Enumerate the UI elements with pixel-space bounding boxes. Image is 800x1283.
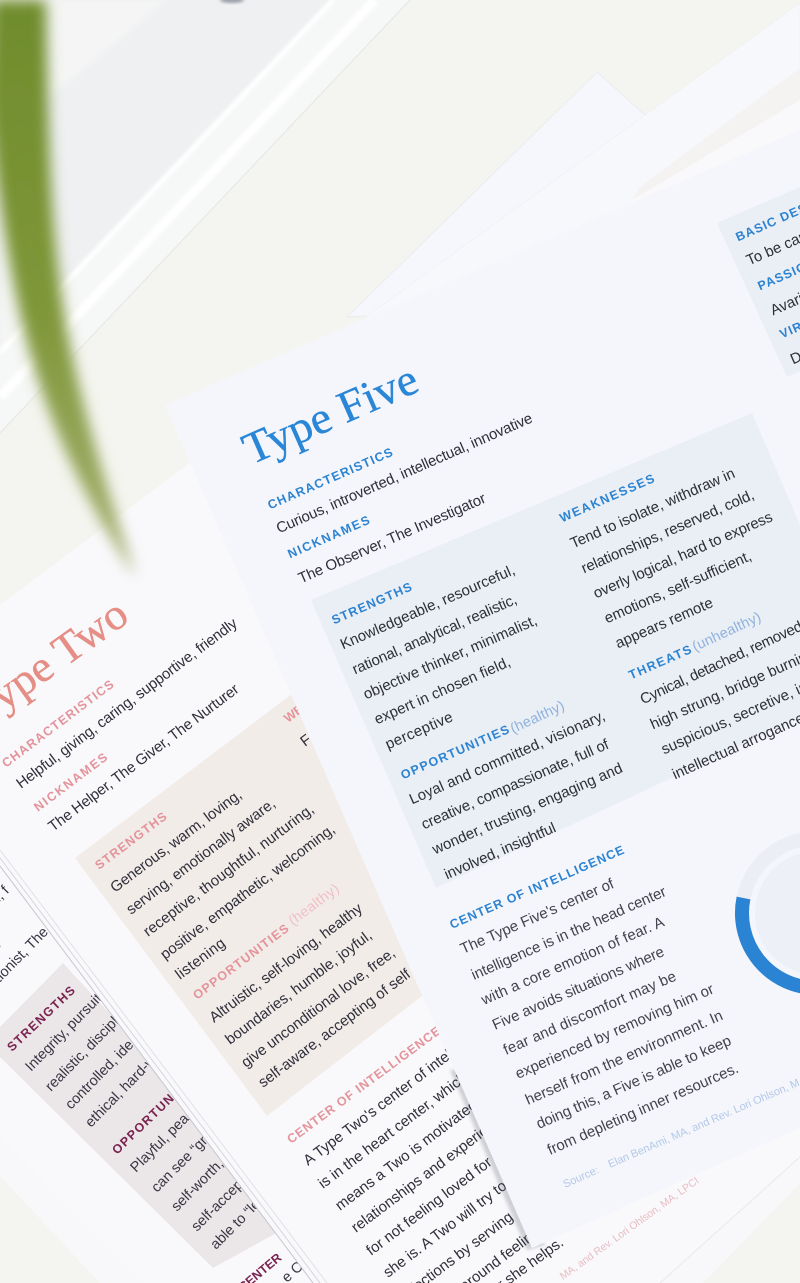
title: Type Five: Type Five — [235, 354, 425, 474]
text: Type Two center of intelligence: means a Two is motivated by — [332, 1084, 497, 1214]
text: Type Two strengths: positive, empathetic, welcoming, — [157, 821, 338, 963]
text: opportunities: involved, insightful — [442, 819, 558, 883]
text: Type One opportunities: able to “let go” — [208, 1176, 284, 1253]
text: Type Two characteristics and nicknames: CHARACTERISTICS — [0, 677, 116, 770]
text: opportunities: creative, compassionate, full of — [419, 736, 612, 833]
text: Type One strengths: STRENGTHS — [4, 983, 78, 1054]
text: Type Two center of intelligence — [284, 1018, 567, 1283]
text: Type One strengths: ethical, hard-working — [82, 1024, 188, 1131]
text: Type Two opportunities: give unconditional love, free, — [238, 944, 399, 1071]
text: Type Two characteristics and nicknames: Helpful, giving, caring, supportive, friendly — [13, 615, 241, 792]
text: Type One strengths — [4, 979, 188, 1131]
second back sheet — [345, 3, 800, 332]
text: strengths — [330, 562, 540, 753]
text: Type Two opportunities: OPPORTUNITIES — [190, 921, 291, 1002]
text: threats: THREATS — [627, 642, 694, 682]
text: Type One opportunities: self-worth, — [169, 1156, 227, 1215]
text: Type Two center of intelligence: she is. A Two will try to win — [380, 1161, 531, 1281]
text: Type Two strengths: STRENGTHS — [92, 809, 169, 872]
tinted panel: basic desire, passion, virtue — [717, 187, 800, 377]
text: Type Two strengths — [92, 786, 338, 983]
text: weaknesses: Tend to isolate, withdraw in — [568, 465, 738, 552]
text: weaknesses: appears remote — [613, 594, 716, 652]
sheet: Type Five — [165, 130, 800, 1248]
tinted panel: Type Two — [75, 665, 520, 1116]
text: strengths: rational, analytical, realistic, — [350, 591, 520, 678]
text: Type Two weaknesses fragment: Fear — [297, 718, 332, 750]
text: center of intelligence: CENTER OF INTELLIGENCE — [448, 843, 626, 932]
text: center of intelligence: The Type Five's center of — [458, 875, 617, 958]
text: opportunities — [399, 698, 625, 883]
text: Type Two weaknesses fragment: WEAKNESSES — [281, 661, 361, 725]
text: characteristics and nicknames: NICKNAMES — [286, 513, 372, 561]
sheet edge on stack — [660, 1157, 800, 1283]
text: weaknesses: relationships, reserved, cold, — [579, 486, 757, 577]
text: opportunities: OPPORTUNITIES — [399, 722, 511, 782]
text: center of intelligence: intelligence is in the head center — [469, 883, 669, 984]
shadow under lower left edge of Type Five sheet — [450, 1070, 545, 1250]
text: opportunities: wonder, trusting, engaging and — [429, 760, 625, 859]
text: Type Two opportunities: boundaries, humble, joyful, — [222, 927, 375, 1048]
text: Type One summary lines — [0, 882, 52, 1016]
source line: Type Two: MA, and Rev. Lori Ohlson, MA, LPCI — [558, 1175, 701, 1282]
text: Type Two opportunities: Altruistic, self-loving, healthy — [206, 900, 366, 1026]
text: strengths: objective thinker, minimalist, — [361, 612, 540, 703]
text: Type Two strengths: Generous, warm, loving, — [107, 786, 245, 896]
source line: Type Five — [561, 1062, 800, 1191]
text: characteristics and nicknames — [266, 410, 535, 587]
text: Type One strengths: realistic, disciplined, — [42, 992, 144, 1095]
text: opportunities: Loyal and committed, visionary, — [407, 707, 608, 808]
text: Type Two characteristics and nicknames: NICKNAMES — [31, 750, 110, 814]
text: Type One opportunities: OPPORTUNITIES — [109, 1065, 204, 1157]
text: Type Two strengths: serving, emotionally aware, — [123, 795, 279, 918]
text: characteristics and nicknames: Curious, introverted, intellectual, innovative — [274, 410, 535, 537]
donut chart: center of intelligence — [742, 838, 800, 988]
text: Type One opportunities: Playful, peaceful, — [128, 1086, 217, 1176]
text: weaknesses: overly logical, hard to express — [591, 509, 775, 602]
text: Type Two center of intelligence: is in the heart center, which — [315, 1069, 471, 1192]
tinted panel: strengths, weaknesses, opportunities, threats — [311, 413, 800, 888]
clear acrylic object in the top left corner — [0, 0, 410, 433]
text: Type Two characteristics and nicknames: The Helper, The Giver, The Nurturer — [45, 681, 242, 835]
text: basic desire, passion, virtue — [734, 191, 800, 368]
text: Type Two opportunities: self-aware, accepting of self — [255, 965, 415, 1091]
text: Type Two strengths: receptive, thoughtful, nurturing, — [140, 801, 317, 940]
text: center of intelligence: experienced by removing him or — [513, 981, 716, 1083]
text: Type Two center of intelligence: CENTER OF INTELLIGENCE — [284, 1024, 443, 1146]
back sheet with pointed corner — [347, 72, 660, 317]
text: Type One opportunities: self-accepting, — [189, 1157, 266, 1235]
tinted panel on second back sheet — [625, 68, 800, 210]
text: weaknesses: WEAKNESSES — [558, 471, 657, 525]
text: strengths: Knowledgeable, resourceful, — [338, 562, 518, 653]
text: center of intelligence: doing this, a Five is able to keep — [534, 1032, 734, 1133]
text: strengths: STRENGTHS — [330, 580, 414, 627]
text: center of intelligence — [448, 843, 741, 1159]
text: Type Two opportunities: (healthy) — [286, 881, 343, 929]
text: opportunities: (healthy) — [508, 698, 567, 737]
text: Type One strengths: controlled, idealistic, — [62, 1008, 165, 1113]
text: Type Two center of intelligence: relationships and experiences — [348, 1103, 517, 1236]
source line: Type Five: Source: — [561, 1164, 601, 1191]
text: Type Two center of intelligence: for not feeling loved for who — [363, 1135, 521, 1259]
text: center of intelligence: from depleting inner resources. — [545, 1060, 741, 1159]
text: Type Two strengths: listening — [172, 935, 229, 983]
text: Type Two center of intelligence: A Type Two's center of intelligence — [300, 1018, 493, 1169]
text: center of intelligence: Five avoids situations where — [490, 943, 667, 1034]
text: strengths: expert in chosen field, — [372, 654, 513, 728]
text: strengths: perceptive — [383, 709, 456, 753]
text: Type Two opportunities — [190, 881, 415, 1091]
text: characteristics and nicknames: The Observer, The Investigator — [296, 490, 488, 587]
text: Type One opportunities — [109, 1065, 307, 1283]
tinted panel: Type One — [0, 963, 300, 1268]
text: center of intelligence: fear and discomfort may be — [501, 968, 679, 1059]
text: threats: (unhealthy) — [690, 609, 764, 655]
text: Type One opportunities: can see “gray”, — [149, 1116, 228, 1196]
text: weaknesses — [558, 465, 775, 652]
text: characteristics and nicknames: CHARACTERISTICS — [266, 445, 395, 512]
text: Type One strengths: Integrity, pursuit of — [22, 979, 117, 1075]
text: weaknesses: emotions, self-sufficient, — [602, 548, 754, 627]
sheet: Type One — [0, 800, 500, 1283]
text: threats — [627, 609, 800, 783]
text: center of intelligence: herself from the environment. In — [523, 1007, 726, 1109]
text: center of intelligence: with a core emotion of fear. A — [478, 914, 667, 1009]
bottom stack sheet — [0, 700, 800, 1283]
plant leaf, blurred in the foreground — [0, 0, 136, 578]
